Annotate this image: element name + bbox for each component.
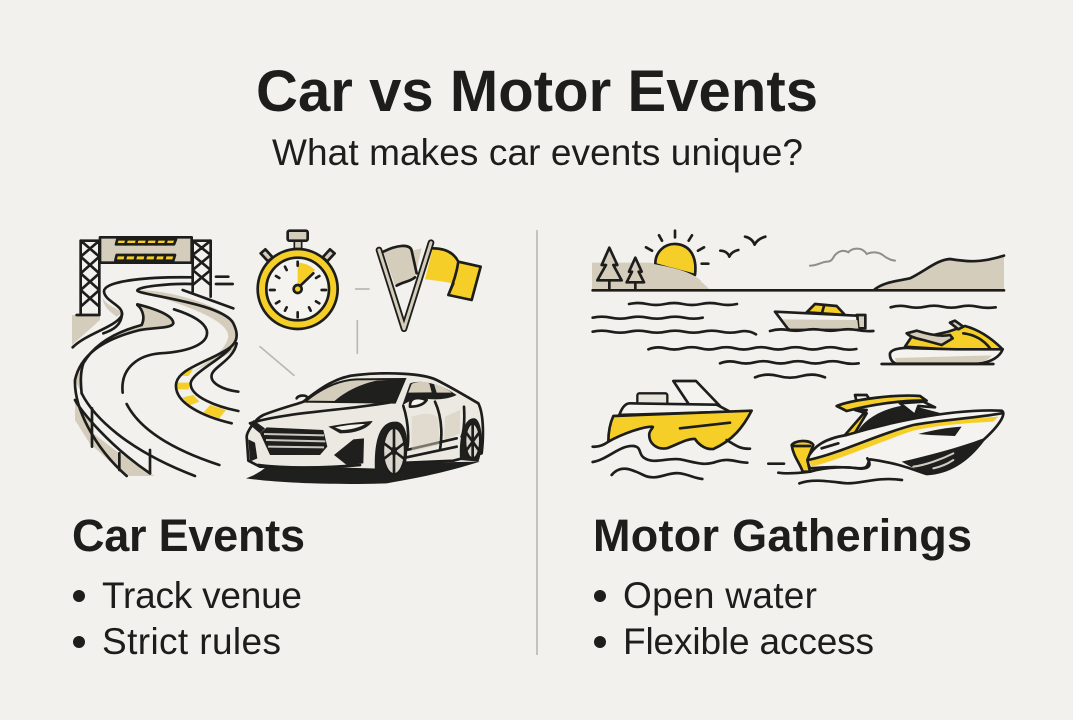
trees bbox=[597, 248, 644, 290]
side windows bbox=[402, 382, 457, 406]
bullet list: motor gatherings: Flexible access bbox=[623, 621, 874, 662]
illustration: car bbox=[246, 373, 483, 484]
small boat bbox=[770, 304, 873, 331]
bullet list: motor gatherings bbox=[594, 575, 874, 662]
illustration: yellow hull boat bbox=[593, 381, 752, 479]
panel: car events bbox=[72, 510, 305, 662]
panel: motor gatherings bbox=[593, 510, 972, 662]
title: Car vs Motor Events bbox=[256, 59, 818, 124]
illustration: lake scenery bbox=[592, 231, 1004, 378]
sun bbox=[646, 231, 708, 282]
bullet list: car events bbox=[73, 575, 302, 662]
hill and trees bbox=[592, 263, 710, 290]
windshield bbox=[305, 379, 405, 403]
heading: car events: Car Events bbox=[72, 510, 305, 561]
bumper vents bbox=[248, 439, 257, 462]
jet ski bbox=[882, 321, 1003, 364]
icon: stopwatch bbox=[258, 231, 338, 329]
car shadow bbox=[246, 462, 480, 484]
bullet list: motor gatherings: Open water bbox=[623, 575, 817, 616]
yellow lane stripes bbox=[182, 369, 193, 376]
wheels bbox=[375, 422, 407, 478]
illustration: speedboat bbox=[768, 395, 1003, 483]
headlight bbox=[328, 421, 373, 433]
heading: motor gatherings: Motor Gatherings bbox=[593, 510, 972, 561]
grille bbox=[260, 427, 327, 455]
mountain bbox=[874, 256, 1004, 290]
bullet list: car events: Track venue bbox=[102, 575, 302, 616]
divider bbox=[536, 230, 538, 655]
subtitle: What makes car events unique? bbox=[272, 132, 803, 173]
cloud bbox=[810, 249, 895, 266]
waves bbox=[593, 303, 996, 378]
connector lines bbox=[260, 289, 369, 375]
gantry towers bbox=[77, 241, 211, 315]
bullet list: car events: Strict rules bbox=[102, 621, 281, 662]
horizon bbox=[593, 286, 1004, 294]
gantry sign bbox=[100, 237, 192, 263]
icon: flags bbox=[379, 243, 481, 329]
illustration: race track and gantry bbox=[72, 237, 238, 476]
birds bbox=[720, 237, 765, 257]
